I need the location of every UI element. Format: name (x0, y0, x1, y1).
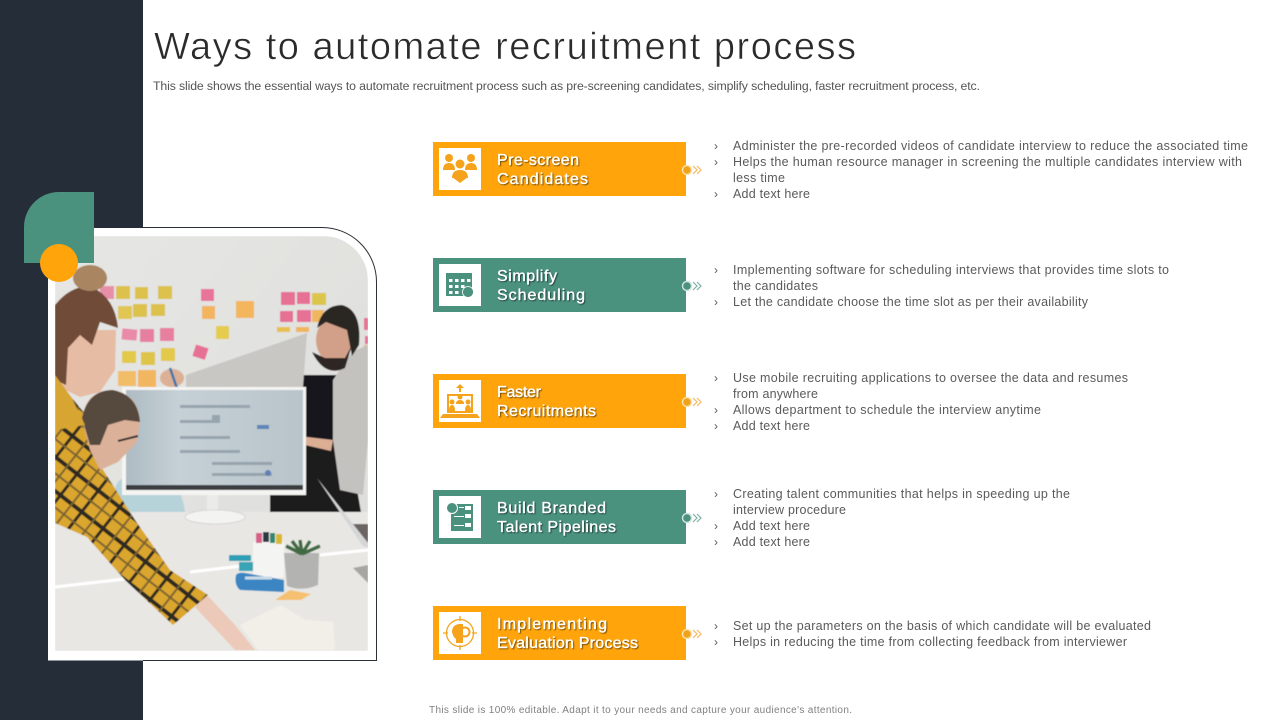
label: Build Branded (497, 500, 606, 517)
text block 2 (714, 263, 1169, 309)
pen cup (253, 541, 284, 578)
text block 2: › (714, 263, 718, 277)
woman shoulder (55, 375, 85, 430)
card 3: Faster Recruitments: Recruitments (497, 403, 596, 420)
card 4: Build Branded Talent Pipelines: Talent Pipelines (497, 519, 616, 536)
monitor stand (208, 496, 218, 510)
man on right trousers (269, 444, 362, 513)
man blazer and arm (186, 333, 307, 387)
woman plaid shirt (55, 383, 208, 625)
connector dot (682, 514, 692, 522)
card 5: Implementing Evaluation Process (433, 606, 701, 660)
connector dot (682, 166, 692, 174)
text block 1: › (714, 155, 718, 169)
sticky notes on wall (100, 286, 368, 387)
connector dot (682, 282, 692, 290)
text block 4: Add text here (733, 519, 810, 533)
icon tile: evaluation target (439, 612, 481, 654)
chevrons (693, 514, 701, 522)
text block 3: Allows department to schedule the interview anytime (733, 403, 1041, 417)
text block 5: › (714, 635, 718, 649)
text block 5: Set up the parameters on the basis of which candidate will be evaluated (733, 619, 1151, 633)
card 1: Pre-screen Candidates: Candidates (497, 171, 588, 188)
text block 2: Let the candidate choose the time slot as per their availability (733, 295, 1089, 309)
card 5: Implementing Evaluation Process: Evaluation Process (497, 635, 638, 652)
text block 4: › (714, 519, 718, 533)
icon tile: candidates (439, 148, 481, 190)
icon tile: checklist (439, 496, 481, 538)
chevrons (693, 630, 701, 638)
text block 5 (714, 619, 1151, 649)
photo: team at monitor (55, 236, 368, 651)
man head (316, 321, 352, 359)
icon tile: laptop with people (439, 380, 481, 422)
text block 3: Use mobile recruiting applications to oversee the data and resumes (733, 371, 1128, 385)
text block 3: from anywhere (733, 387, 818, 401)
text block 3: › (714, 403, 718, 417)
monitor (122, 387, 306, 495)
text block 4: Add text here (733, 535, 810, 549)
chevrons (693, 166, 701, 174)
text block 4: Creating talent communities that helps in speeding up the (733, 487, 1070, 501)
panel: photo frame (48, 228, 377, 660)
laptop (317, 478, 368, 548)
title: Ways to automate recruitment process (154, 26, 856, 68)
desk (166, 512, 368, 650)
text block 1 (714, 139, 1248, 201)
woman arm hand (195, 595, 255, 650)
paper (240, 605, 335, 650)
text block 4: › (714, 535, 718, 549)
label: Faster (497, 384, 542, 401)
text block 1: less time (733, 171, 785, 185)
connector dot (682, 398, 692, 406)
chevrons (693, 398, 701, 406)
woman head (55, 330, 116, 397)
card 1: Pre-screen Candidates (433, 142, 701, 196)
frame outline (143, 228, 376, 660)
text block 2: Implementing software for scheduling interviews that provides time slots to (733, 263, 1169, 277)
plant pot (284, 553, 319, 589)
chevrons (693, 282, 701, 290)
text block 5: Helps in reducing the time from collecting feedback from interviewer (733, 635, 1127, 649)
text block 2: › (714, 295, 718, 309)
label: Simplify (497, 268, 557, 285)
text block 1: › (714, 139, 718, 153)
text block 1: Helps the human resource manager in screening the multiple candidates interview with (733, 155, 1242, 169)
text block 5: › (714, 619, 718, 633)
card 4: Build Branded Talent Pipelines (433, 490, 701, 544)
icon tile: calendar (439, 264, 481, 306)
text block 1: Add text here (733, 187, 810, 201)
footer note: This slide is 100% editable. Adapt it to your needs and capture your audience's attention. (429, 705, 852, 716)
woman hair bun (73, 265, 107, 291)
blue eraser (236, 573, 284, 592)
accent: orange circle (40, 244, 78, 282)
text block 4 (714, 487, 1070, 549)
teal sticky pads (229, 555, 251, 561)
label: Pre-screen (497, 152, 579, 169)
orange note (275, 590, 311, 600)
text block 1: Administer the pre-recorded videos of candidate interview to reduce the associated time (733, 139, 1248, 153)
card 2: Simplify Scheduling (433, 258, 701, 312)
label: Implementing (497, 616, 607, 633)
seated man head (82, 390, 140, 470)
text block 4: › (714, 487, 718, 501)
text block 4: interview procedure (733, 503, 846, 517)
subtitle: This slide shows the essential ways to automate recruitment process such as pre-screening candidates, simplify scheduling, faster recruitment process, etc. (153, 79, 980, 93)
connector dot (682, 630, 692, 638)
sidebar (0, 0, 143, 720)
chair (112, 478, 185, 512)
accent: green shape (24, 192, 94, 263)
card 3: Faster Recruitments (433, 374, 701, 428)
text block 3: › (714, 371, 718, 385)
text block 1: › (714, 187, 718, 201)
text block 3: › (714, 419, 718, 433)
card 2: Simplify Scheduling: Scheduling (497, 287, 585, 304)
man hand (160, 369, 184, 387)
man on right shirt (302, 374, 337, 438)
text block 3: Add text here (733, 419, 810, 433)
text block 2: the candidates (733, 279, 818, 293)
text block 3 (714, 371, 1128, 433)
